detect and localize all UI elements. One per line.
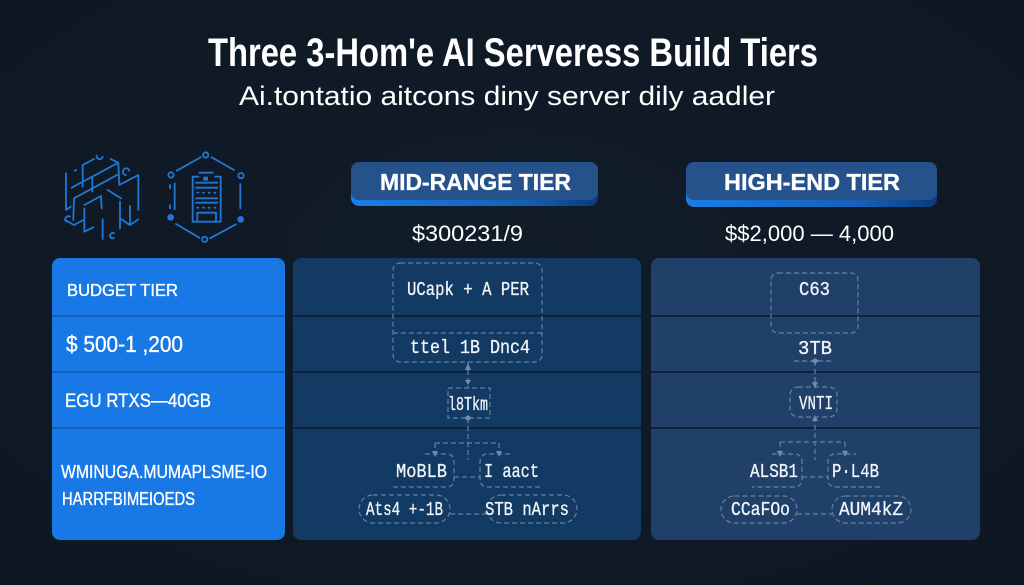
panel: mid-range tier: MoBLB [396, 461, 447, 483]
panel: high-end tier: C63 [799, 279, 830, 301]
panel: mid-range tier: l8Tkm [448, 394, 488, 416]
panel: mid-range tier: ttel 1B Dnc4 [410, 337, 530, 359]
panel: mid-range tier: STB nArrs [485, 499, 569, 521]
icon: circuit cube [65, 156, 138, 239]
high-end tier heading [686, 162, 937, 207]
panel: mid-range tier: I aact [484, 461, 539, 483]
panel: high-end tier: AUM4kZ [839, 499, 903, 521]
panel: mid-range tier: UCapk + A PER [407, 279, 529, 301]
panel: high-end tier: P·L4B [832, 461, 879, 483]
panel: budget tier: HARRFBIMEIOEDS [62, 489, 195, 509]
panel: budget tier [52, 258, 285, 540]
panel: budget tier: BUDGET TIER [67, 280, 178, 300]
subtitle: Ai.tontatio aitcons diny server dily aadler [239, 81, 775, 111]
high-end price: $$2,000 — 4,000 [725, 221, 894, 246]
panel: high-end tier: 3TB [798, 338, 832, 360]
panel: mid-range tier [293, 258, 641, 540]
panel: mid-range tier: Ats4 +-1B [366, 499, 443, 521]
panel: budget tier: WMINUGA.MUMAPLSME-IO [61, 462, 267, 482]
panel: high-end tier [651, 258, 980, 540]
high-end tier heading: HIGH-END TIER [724, 169, 900, 195]
panel: budget tier: EGU RTXS—40GB [65, 391, 211, 412]
panel: high-end tier: VNTI [799, 393, 833, 415]
mid-range tier heading: MID-RANGE TIER [380, 169, 571, 195]
mid-range price: $300231/9 [412, 221, 523, 246]
panel: high-end tier: CCaFOo [731, 499, 790, 521]
panel: high-end tier: ALSB1 [750, 461, 798, 483]
panel: budget tier: $ 500-1 ,200 [66, 331, 183, 357]
mid-range tier heading [351, 162, 598, 206]
icon: server in hexagon [167, 152, 244, 242]
title: Three 3-Hom'e AI Serveress Build Tiers [208, 31, 818, 75]
